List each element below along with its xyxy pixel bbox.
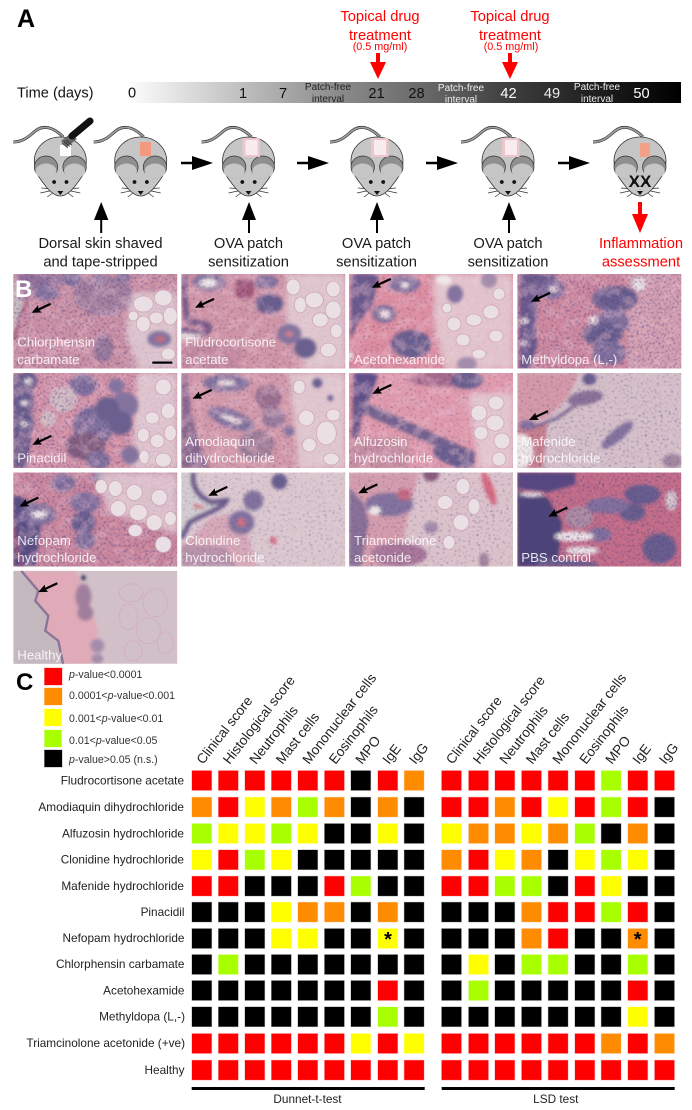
panel: histology Chlorphensin carbamate: Chlorphensin [17, 335, 95, 350]
step label: shaved [38, 236, 163, 270]
timeline gradient bar: interval [581, 94, 613, 105]
timeline gradient bar: 49 [544, 86, 560, 102]
legend: p-value<0.0001 [68, 669, 142, 681]
row labels: Clonidine hydrochloride [61, 852, 184, 866]
panel: histology Amodiaquin dihydrochloride [181, 373, 346, 468]
panel: histology Triamcinolone acetonide: Triamcinolone [354, 533, 436, 548]
timeline gradient bar: Patch-free [574, 82, 621, 93]
row labels: Alfuzosin hydrochloride [62, 826, 184, 840]
arrow up: shave step [94, 202, 108, 233]
panel: histology Triamcinolone acetonide [349, 472, 513, 566]
mouse 4: OVA patch [330, 127, 403, 197]
column headers: LSD test [443, 671, 681, 767]
column headers: LSD test: IgE [630, 741, 654, 767]
panel letter C: C [16, 669, 33, 696]
arrow [297, 156, 329, 170]
row labels: Mafenide hydrochloride [61, 879, 184, 893]
column headers: Dunnet-t-test: Mononuclear cells [300, 671, 379, 767]
column headers: LSD test: Neutrophils [497, 703, 551, 767]
panel letter B: B [15, 276, 32, 303]
step label: OVA 2 [336, 236, 417, 270]
timeline gradient bar: 1 [239, 86, 247, 102]
legend: p-value>0.05 (n.s.) [68, 754, 158, 766]
mouse 2: tape-stripped skin [94, 127, 167, 197]
column headers: LSD test: Mononuclear cells [550, 671, 629, 767]
row labels: Triamcinolone acetonide (+ve) [26, 1036, 185, 1050]
column headers: Dunnet-t-test: IgE [380, 741, 404, 767]
arrow up: OVA 3 [502, 202, 516, 233]
timeline gradient bar: 7 [279, 86, 287, 102]
step label: OVA 3: OVA patch [473, 236, 543, 252]
annotation: second topical drug treatment: Topical drug [470, 9, 550, 25]
panel: histology Methyldopa: Methyldopa (L,-) [521, 352, 617, 367]
timeline gradient bar: 50 [633, 86, 650, 102]
step label: inflammation assessment: assessment [602, 254, 680, 270]
arrow [181, 156, 213, 170]
panel: histology Fludrocortisone acetate [181, 274, 346, 368]
row labels: Amodiaquin dihydrochloride [38, 800, 184, 814]
timeline gradient bar: Patch-free [438, 83, 485, 94]
row labels: Methyldopa (L,-) [99, 1010, 185, 1024]
timeline gradient bar: 21 [368, 86, 385, 102]
panel: histology Healthy [13, 570, 178, 664]
panel: histology Chlorphensin carbamate: carbamate [17, 352, 80, 367]
column headers: Dunnet-t-test: MPO [353, 733, 384, 767]
heatmap: LSD test: * [634, 929, 642, 951]
arrow up: OVA 2 [370, 202, 384, 233]
panel: histology Nefopam hydrochloride: Nefopam [17, 533, 71, 548]
timeline gradient bar: 28 [408, 86, 425, 102]
panel: histology Fludrocortisone acetate: acetate [185, 352, 229, 367]
arrow down: inflammation [632, 202, 648, 233]
legend [44, 668, 175, 767]
column headers: LSD test: Clinical score [443, 693, 505, 767]
step label: OVA 1: OVA patch [214, 236, 283, 252]
mouse 1: shaved with clipper [13, 121, 90, 197]
column headers: LSD test: MPO [603, 733, 634, 767]
column headers: Dunnet-t-test: IgG [406, 740, 431, 767]
panel: histology Acetohexamide: Acetohexamide [354, 352, 445, 367]
step label: OVA 1 [208, 236, 289, 270]
mouse 5: OVA patch [461, 127, 534, 197]
step label: OVA 3 [468, 236, 548, 270]
annotation: first topical drug treatment [340, 9, 420, 79]
row labels: Chlorphensin carbamate [56, 957, 185, 971]
step label: OVA 2: sensitization [336, 254, 417, 270]
panel: histology Acetohexamide [349, 274, 513, 368]
panel: histology Fludrocortisone acetate: Fludrocortisone [185, 335, 276, 350]
step label: OVA 2: OVA patch [342, 236, 411, 252]
row labels: Fludrocortisone acetate [61, 774, 184, 788]
heatmap: Dunnet-t-test [192, 771, 424, 1080]
column headers: Dunnet-t-test: Neutrophils [247, 703, 301, 767]
step label: inflammation assessment: Inflammation [599, 236, 683, 252]
timeline gradient bar [125, 82, 681, 106]
step label: shaved: and tape-stripped [43, 254, 158, 270]
panel: histology Alfuzosin hydrochloride [349, 373, 513, 468]
timeline gradient bar: interval [312, 94, 344, 105]
panel: histology Methyldopa [517, 274, 682, 368]
panel: histology Mafenide hydrochloride: Mafenide [521, 434, 576, 449]
panel: histology Mafenide hydrochloride: hydrochloride [521, 450, 600, 466]
group bar and label: Dunnet-t-test [192, 1087, 425, 1106]
column headers: LSD test: Mast cells [523, 710, 572, 767]
panel: histology Alfuzosin hydrochloride: hydrochloride [354, 450, 433, 466]
panel: histology PBS control: PBS control [521, 550, 591, 565]
panel: histology PBS control [517, 472, 682, 566]
panel: histology Amodiaquin dihydrochloride: dihydrochloride [185, 450, 275, 466]
arrow [426, 156, 458, 170]
annotation: second topical drug treatment [470, 9, 550, 79]
column headers: Dunnet-t-test: Clinical score [194, 693, 255, 767]
annotation: second topical drug treatment: (0.5 mg/ml) [484, 41, 538, 53]
group bar and label: LSD test [442, 1087, 675, 1106]
panel: histology Clonidine hydrochloride: hydrochloride [185, 550, 264, 565]
arrow [558, 156, 590, 170]
heatmap: LSD test [442, 771, 674, 1080]
column headers: Dunnet-t-test [194, 671, 431, 767]
annotation: first topical drug treatment: (0.5 mg/ml) [353, 41, 407, 53]
step label: shaved: Dorsal skin shaved [38, 236, 163, 252]
panel: histology Nefopam hydrochloride [13, 472, 178, 566]
timeline gradient bar: 0 [128, 86, 136, 102]
legend: 0.01<p-value<0.05 [69, 735, 157, 747]
panel: histology Amodiaquin dihydrochloride: Amodiaquin [185, 434, 255, 449]
column headers: Dunnet-t-test: Histological score [220, 673, 298, 767]
annotation: second topical drug treatment: treatment [479, 28, 541, 44]
step label: OVA 1: sensitization [208, 254, 289, 270]
column headers: LSD test: IgG [656, 740, 681, 767]
row labels: Healthy [144, 1063, 185, 1077]
column headers: Dunnet-t-test: Mast cells [273, 710, 322, 767]
step label: inflammation assessment [599, 236, 683, 270]
annotation: first topical drug treatment: Topical drug [340, 9, 420, 25]
heatmap: Dunnet-t-test: * [384, 929, 392, 951]
group bar and label: LSD test: LSD test [533, 1092, 579, 1106]
row labels: Nefopam hydrochloride [63, 931, 185, 945]
column headers: LSD test: Eosinophils [577, 702, 632, 767]
panel: histology Mafenide hydrochloride [517, 373, 682, 468]
mouse 6: inflammation assessment: XX [629, 172, 652, 191]
column headers: LSD test: Histological score [470, 673, 548, 767]
panel: histology Chlorphensin carbamate [13, 274, 178, 368]
group bar and label: Dunnet-t-test: Dunnet-t-test [273, 1092, 342, 1106]
panel: histology Pinacidil: Pinacidil [17, 450, 66, 466]
panel: histology Pinacidil [13, 373, 178, 468]
mouse 3: OVA patch [202, 127, 274, 197]
legend: 0.001<p-value<0.01 [69, 713, 163, 725]
step label: OVA 3: sensitization [468, 254, 548, 270]
timeline gradient bar: 42 [500, 86, 517, 102]
panel: histology Clonidine hydrochloride: Clonidine [185, 533, 240, 548]
label: time axis: Time (days) [17, 86, 94, 102]
annotation: first topical drug treatment: treatment [349, 28, 411, 44]
timeline gradient bar: Patch-free [305, 82, 352, 93]
panel: histology Alfuzosin hydrochloride: Alfuzosin [354, 434, 408, 449]
mouse 6: inflammation assessment [593, 127, 666, 197]
timeline gradient bar: interval [445, 94, 477, 106]
panel: histology Triamcinolone acetonide: acetonide [354, 550, 411, 565]
panel: histology Clonidine hydrochloride [181, 472, 346, 566]
arrow up: OVA 1 [242, 202, 256, 233]
panel: histology Nefopam hydrochloride: hydrochloride [17, 550, 96, 565]
legend: 0.0001<p-value<0.001 [69, 690, 175, 702]
panel letter A: A [17, 5, 35, 33]
column headers: Dunnet-t-test: Eosinophils [326, 702, 381, 767]
panel: histology Healthy: Healthy [17, 647, 62, 662]
row labels [26, 774, 185, 1077]
row labels: Pinacidil [141, 905, 184, 919]
row labels: Acetohexamide [103, 984, 185, 998]
